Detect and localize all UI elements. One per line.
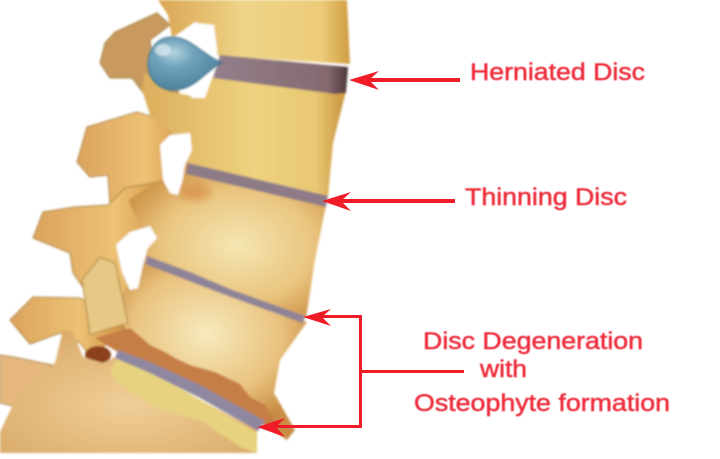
second vertebra [142, 72, 346, 199]
icon: herniated disc bulge [148, 37, 222, 90]
gap above herniation [188, 23, 217, 62]
fifth vertebra [0, 330, 257, 453]
osteophyte fringe [95, 328, 276, 425]
joint shadow [85, 346, 111, 364]
arrow: thinning disc [322, 192, 455, 211]
second disc [186, 163, 328, 207]
label: herniated disc: Herniated Disc [470, 59, 645, 86]
lower spinous process [10, 297, 125, 360]
gap below herniation [186, 76, 208, 98]
lowest disc [115, 350, 265, 431]
arrow: herniated disc [349, 71, 460, 90]
third vertebra [128, 173, 326, 318]
bracket arrows: disc degeneration [257, 309, 464, 437]
spine illustration [0, 0, 350, 453]
label: with: with [479, 356, 527, 383]
gap between third and fourth processes [116, 226, 157, 290]
upper disc [213, 55, 348, 94]
facet joint [82, 257, 128, 335]
label: disc degeneration: Disc Degeneration [423, 328, 643, 355]
gap between second and third processes [160, 133, 192, 195]
fifth vertebra rim [110, 355, 257, 453]
third disc [145, 256, 305, 323]
upper spinous process [100, 13, 185, 125]
label: osteophyte formation: Osteophyte formation [414, 390, 670, 417]
fourth vertebra with osteophytes [97, 263, 307, 440]
vertebra top [158, 0, 350, 64]
orange shading under second disc [179, 183, 211, 201]
left lower process [0, 355, 52, 407]
third spinous process and pedicle [33, 180, 170, 330]
second spinous process [77, 112, 190, 215]
label: thinning disc: Thinning Disc [465, 184, 627, 211]
